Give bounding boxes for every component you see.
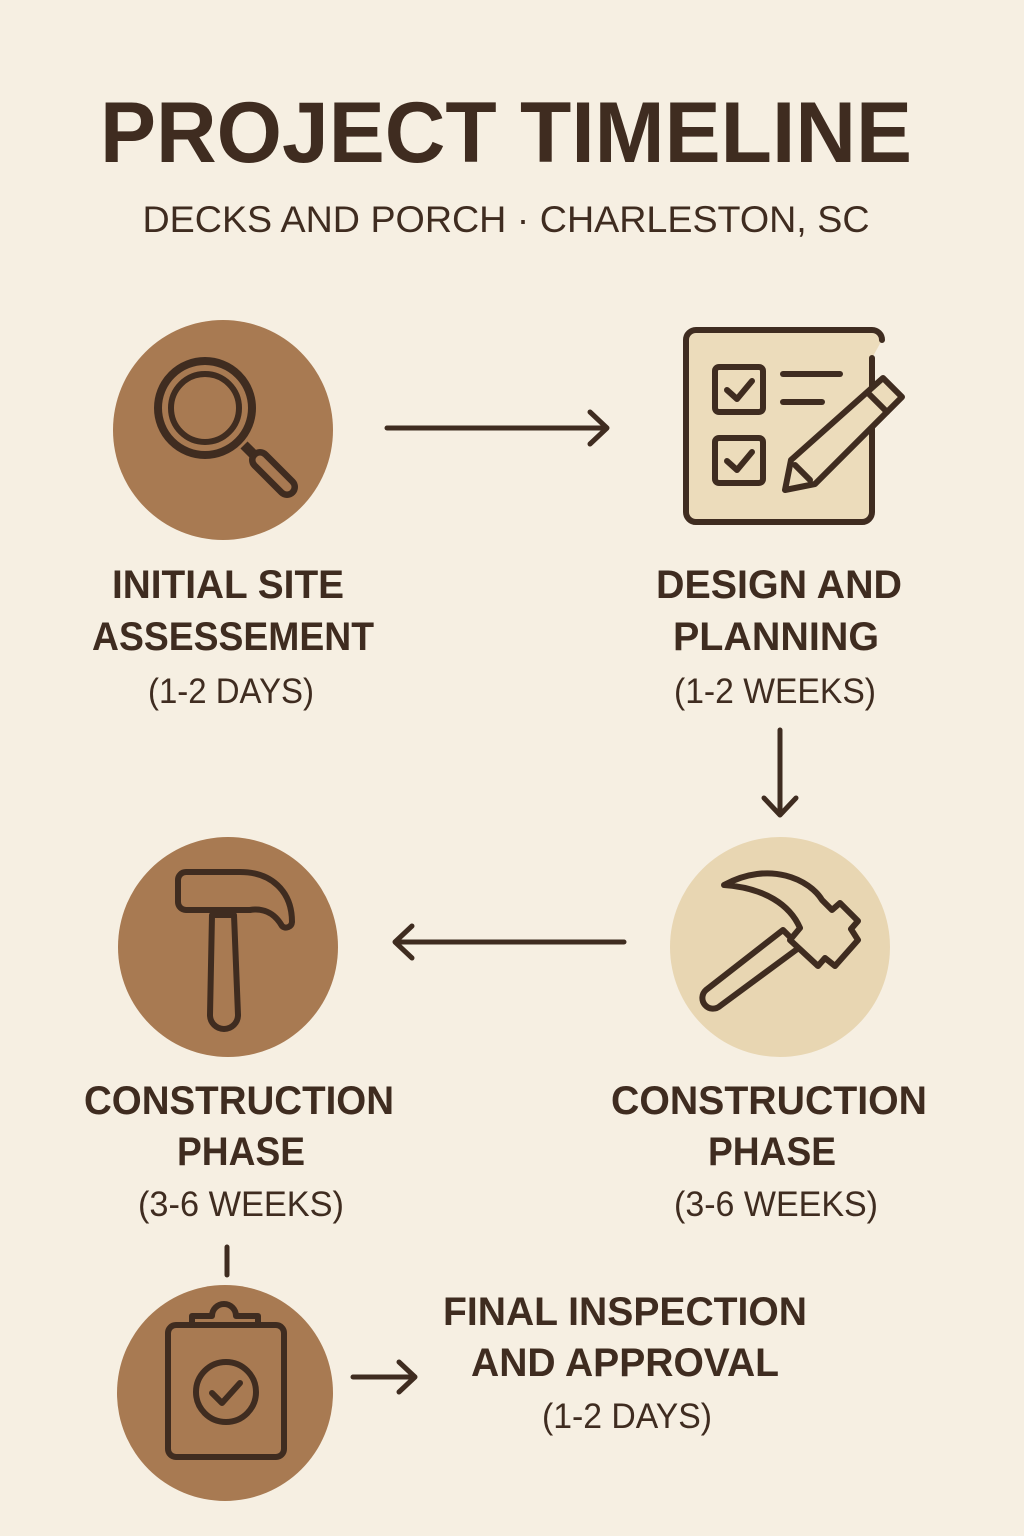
label: INITIAL SITE [112, 563, 344, 607]
label: (3-6 WEEKS) [674, 1185, 878, 1224]
label: CONSTRUCTION [84, 1079, 394, 1123]
step 3 (right): construction phase [611, 837, 927, 1224]
subtitle: DECKS AND PORCH · CHARLESTON, SC [142, 199, 870, 240]
label: AND APPROVAL [471, 1341, 779, 1385]
connector line [224, 1247, 230, 1275]
arrow: down [764, 730, 796, 815]
label: (1-2 DAYS) [542, 1397, 712, 1436]
step 2: design and planning [656, 330, 902, 711]
step 4 (left): construction phase [84, 837, 394, 1224]
label: (3-6 WEEKS) [138, 1185, 344, 1224]
icon: clipboard with check [117, 1285, 333, 1501]
step 5: final inspection [117, 1285, 807, 1501]
icon: hammer on light circle [670, 837, 890, 1057]
label: DESIGN AND [656, 563, 902, 607]
icon: checklist with pencil [686, 330, 902, 522]
label: PLANNING [673, 615, 879, 659]
label: CONSTRUCTION [611, 1079, 927, 1123]
arrow: right small [353, 1362, 415, 1392]
arrow: left [395, 926, 624, 958]
label: (1-2 DAYS) [148, 672, 314, 711]
label [92, 563, 374, 711]
label: PHASE [177, 1130, 305, 1174]
label [611, 1079, 927, 1224]
label: PHASE [708, 1130, 836, 1174]
title: PROJECT TIMELINE [100, 85, 912, 181]
label [656, 563, 902, 711]
label: ASSESSEMENT [92, 615, 374, 659]
step 1: initial site assessment [92, 320, 374, 711]
icon: hammer on brown circle [118, 837, 338, 1057]
label [84, 1079, 394, 1224]
label [443, 1290, 807, 1436]
arrow: right [387, 412, 607, 444]
icon: magnifier circle [113, 320, 333, 540]
label: FINAL INSPECTION [443, 1290, 807, 1334]
label: (1-2 WEEKS) [674, 672, 876, 711]
